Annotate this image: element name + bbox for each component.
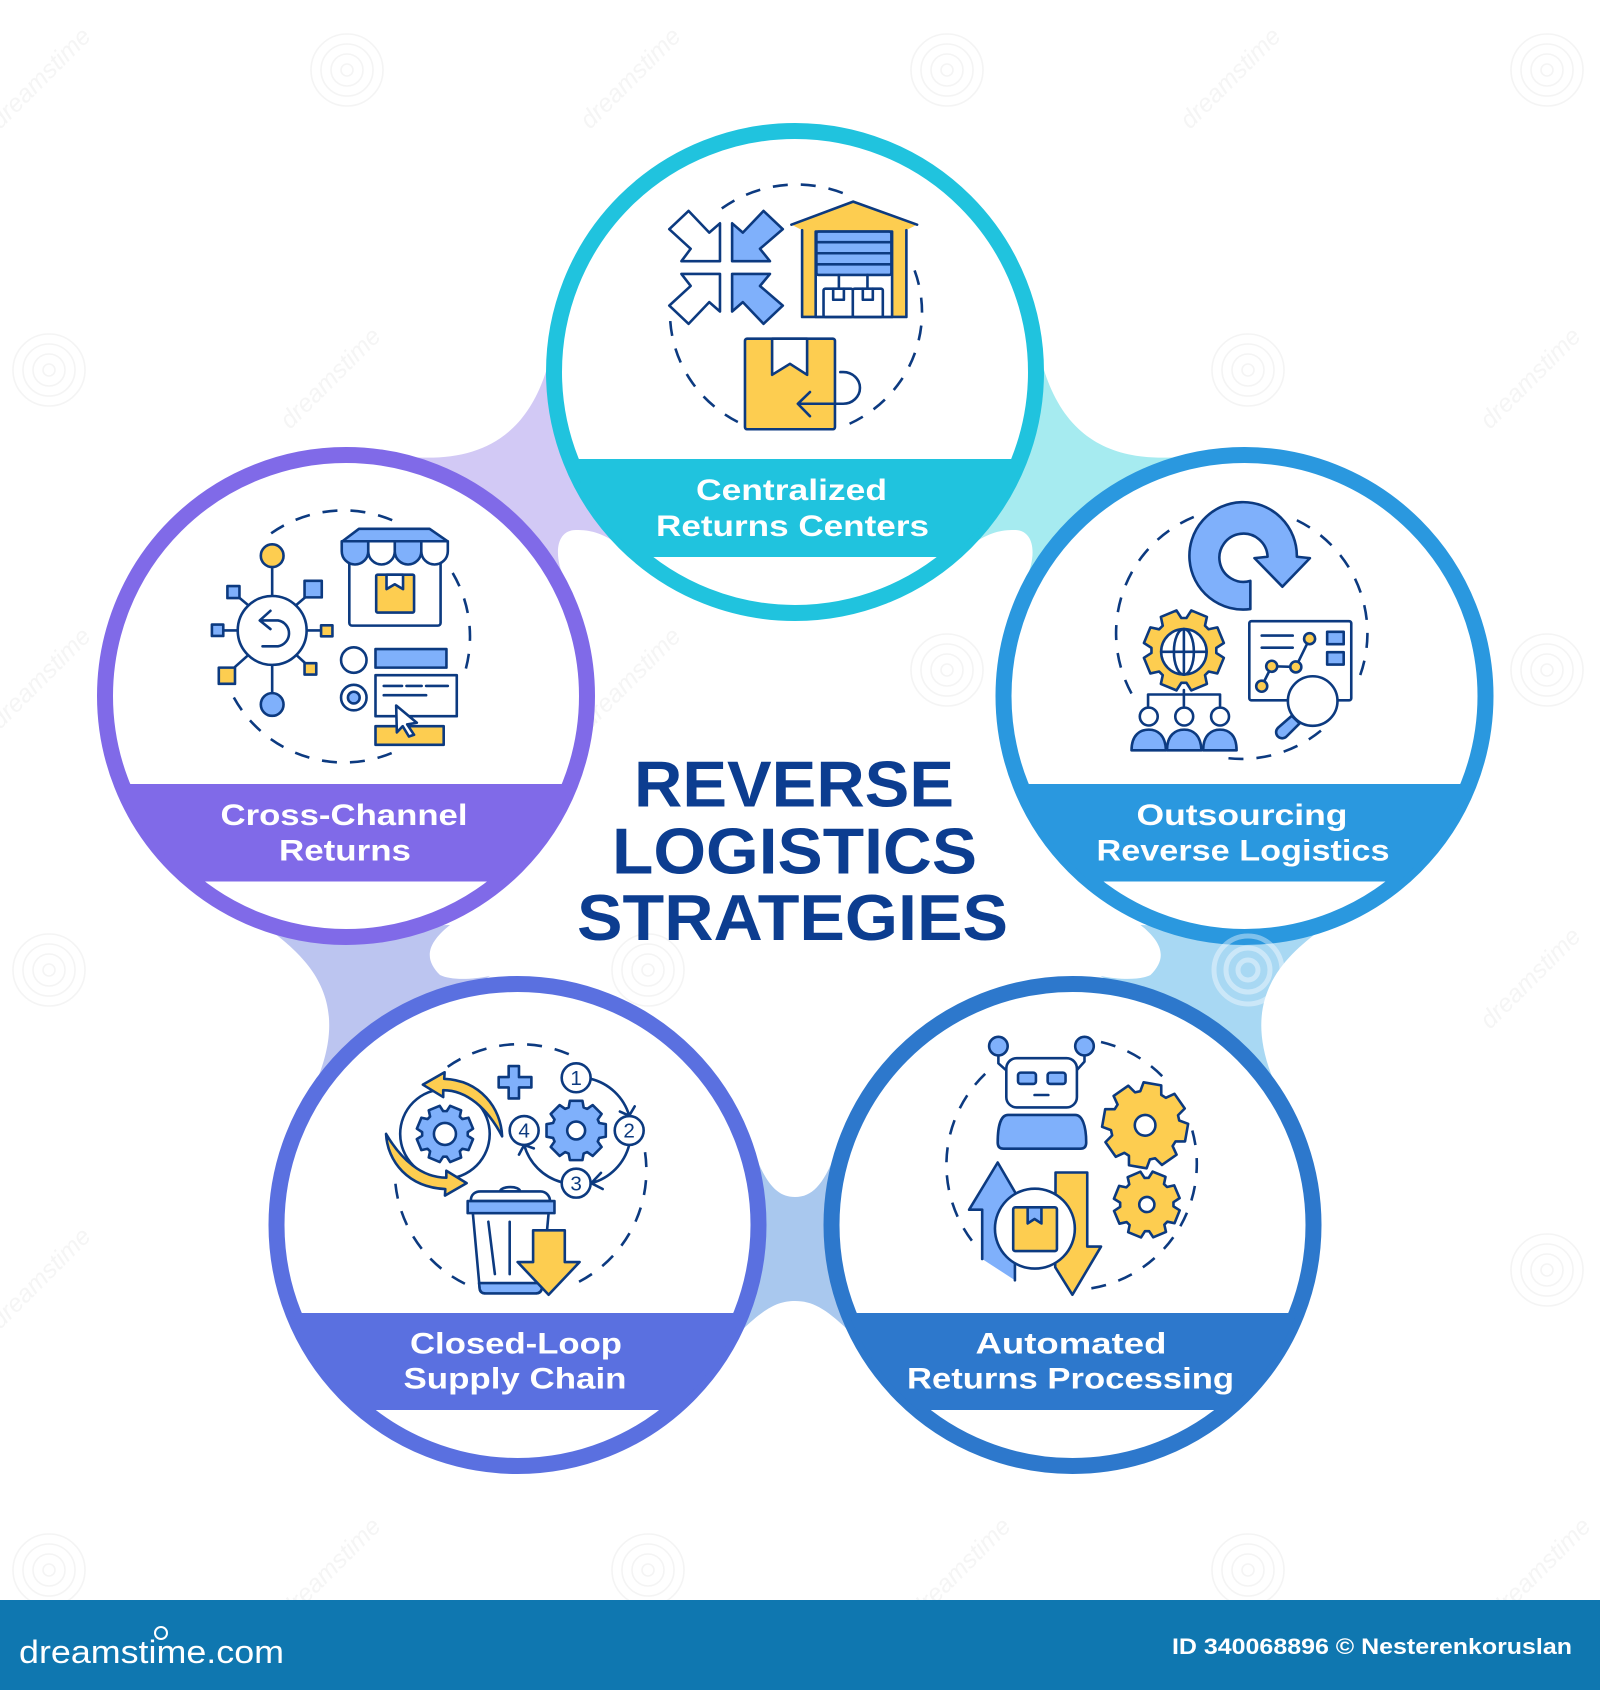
connector: bottom left to bottom right: [742, 1155, 848, 1330]
watermark pattern: dreamstime: [904, 1512, 1017, 1624]
watermark pattern: dreamstime: [274, 1512, 387, 1624]
panel: centralized returns centers: [554, 131, 1036, 613]
icon: robot, gears and up-down arrows: [946, 1037, 1197, 1295]
panel: closed-loop supply chain: [276, 984, 758, 1466]
connector: top to left: [400, 365, 620, 580]
footer credit: ID 340068896 © Nesterenkoruslan: [1172, 1634, 1572, 1659]
label: Automated Returns Processing: Automated: [976, 1328, 1166, 1360]
icon: gear cycle, numbered loop and trash can: 1: [570, 1067, 582, 1090]
watermark pattern: dreamstime: [874, 322, 987, 434]
title: LOGISTICS: [612, 814, 977, 887]
title: REVERSE: [634, 748, 954, 821]
label: Closed-Loop Supply Chain: Supply Chain: [404, 1362, 626, 1396]
watermark pattern: dreamstime: [1484, 1512, 1597, 1624]
icon: warehouse, arrows and return box: [669, 184, 922, 429]
footer bar: [0, 1600, 1600, 1690]
icon: gear cycle, numbered loop and trash can: [386, 1044, 646, 1295]
label: Outsourcing Reverse Logistics: Outsourcing: [1136, 799, 1348, 832]
title: [577, 748, 1008, 954]
connector: left to bottom left: [270, 925, 490, 1080]
title: STRATEGIES: [577, 881, 1008, 954]
watermark pattern: dreamstime: [274, 322, 387, 434]
label: Closed-Loop Supply Chain: Closed-Loop: [410, 1328, 622, 1360]
panel: outsourcing reverse logistics: [1004, 455, 1486, 937]
label: Centralized Returns Centers: Returns Centers: [656, 510, 929, 543]
label: Automated Returns Processing: [907, 1328, 1234, 1396]
label: Closed-Loop Supply Chain: [404, 1328, 626, 1396]
watermark pattern: dreamstime: [574, 622, 687, 734]
icon: gear cycle, numbered loop and trash can: 3: [570, 1172, 582, 1195]
label: Outsourcing Reverse Logistics: Reverse Logistics: [1096, 834, 1390, 868]
watermark spiral over connector: [1214, 936, 1282, 1004]
icon: gear cycle, numbered loop and trash can: 2: [623, 1120, 635, 1143]
label: Outsourcing Reverse Logistics: [1096, 799, 1390, 868]
label: Automated Returns Processing: Returns Processing: [907, 1362, 1234, 1396]
icon: returns hub, store and online form: [212, 510, 470, 762]
label: Cross-Channel Returns: Returns: [279, 834, 411, 868]
label: Centralized Returns Centers: Centralized: [696, 474, 887, 507]
label: Cross-Channel Returns: Cross-Channel: [220, 799, 468, 832]
icon: gear cycle, numbered loop and trash can: 4: [518, 1120, 530, 1143]
watermark pattern: dreamstime: [1474, 322, 1587, 434]
footer logo: dreamstime.com: dreamstime.com: [19, 1634, 284, 1670]
panel: automated returns processing: [832, 984, 1314, 1466]
connector: top to right: [970, 365, 1190, 580]
label: Cross-Channel Returns: [220, 799, 468, 868]
watermark pattern: dreamstime: [574, 22, 687, 134]
watermark pattern: dreamstime: [1474, 922, 1587, 1034]
panel: cross-channel returns: [105, 455, 587, 937]
watermark pattern: dreamstime: [1174, 22, 1287, 134]
icon: cycle arrow, gear globe, team and dashboard: [1116, 502, 1367, 759]
label: Centralized Returns Centers: [656, 474, 929, 543]
connector: right to bottom right: [1100, 925, 1320, 1080]
